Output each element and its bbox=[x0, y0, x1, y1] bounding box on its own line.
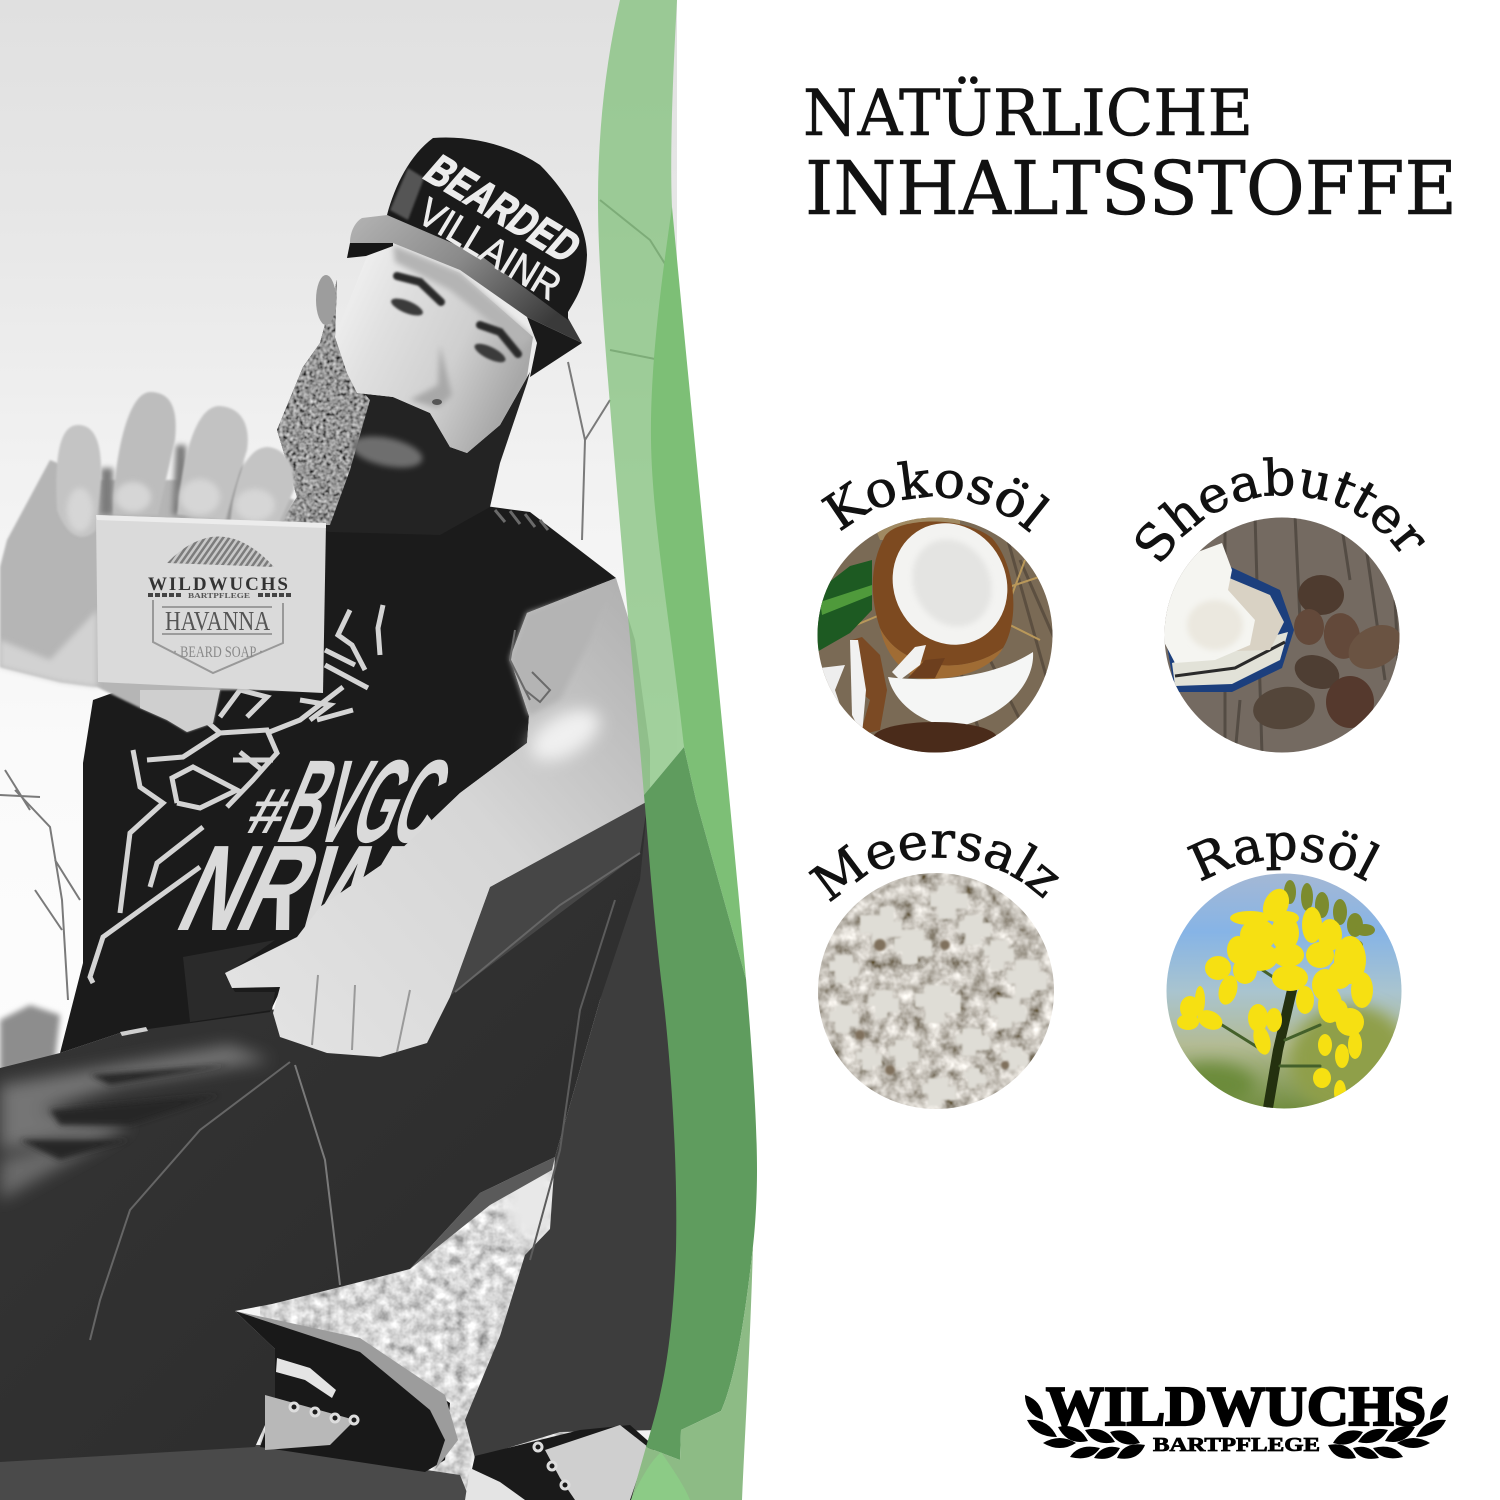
label: Meersalz: Meersalz bbox=[808, 830, 1060, 902]
forehead shadow bbox=[393, 245, 533, 345]
bare tree branches bbox=[0, 200, 672, 1000]
coconut shell with fibres bbox=[873, 521, 1013, 665]
green buds bbox=[1284, 880, 1375, 951]
belt highlight bbox=[120, 1027, 148, 1036]
straw behind coconut bbox=[870, 515, 960, 540]
shirt print: stag bbox=[90, 687, 353, 983]
shirt print: tribal spikes at top bbox=[325, 605, 383, 688]
brand logo bbox=[1025, 1376, 1448, 1459]
under brim strip bbox=[347, 240, 393, 258]
shoulder ribbing bbox=[495, 510, 548, 530]
gaps between fingers bbox=[100, 445, 244, 525]
trouser fold shadows bbox=[20, 1065, 230, 1160]
bright grass patch bbox=[502, 1158, 558, 1242]
soap shield bbox=[153, 600, 283, 673]
photo: bearded man holding soap bbox=[0, 0, 690, 1500]
image: rapeseed flower bbox=[1165, 872, 1410, 1115]
neck and beard bbox=[277, 280, 530, 535]
grass seen below the knee bbox=[260, 1150, 570, 1500]
soap bar bbox=[96, 515, 326, 693]
coconut piece bbox=[892, 645, 926, 680]
coffee beans bbox=[873, 722, 997, 754]
right arm and hand bbox=[225, 578, 650, 1057]
shea nuts bbox=[1250, 575, 1409, 733]
label: Kokosöl: Kokosöl bbox=[820, 460, 1050, 533]
soap rule lines bbox=[162, 607, 272, 634]
finger nails bbox=[67, 479, 275, 532]
salt crystals bbox=[829, 885, 1047, 1106]
soap text: WILDWUCHS: WILDWUCHS bbox=[148, 574, 288, 595]
ingredient: Sheabutter bbox=[1136, 457, 1425, 752]
logo laurel right bbox=[1328, 1395, 1448, 1459]
ground vegetation on the left bbox=[0, 1005, 60, 1072]
nostril bbox=[432, 399, 442, 405]
bowl interior bbox=[1200, 572, 1284, 652]
eyebrows bbox=[397, 276, 518, 354]
stem and branches bbox=[1222, 965, 1320, 1108]
finger two bbox=[113, 392, 176, 515]
cap text: VILLAINR: VILLAINR bbox=[410, 190, 568, 309]
coconut chunk bbox=[888, 652, 1033, 727]
image: sea salt bbox=[815, 870, 1060, 1115]
shirt text: BVGC: BVGC bbox=[264, 736, 467, 868]
ingredient: Rapsöl bbox=[1166, 830, 1402, 1108]
cap logo text bbox=[410, 147, 591, 309]
curled shavings bbox=[852, 637, 887, 735]
face bbox=[335, 272, 533, 453]
right leg bbox=[465, 800, 690, 1458]
knee highlight seam bbox=[410, 1157, 555, 1269]
cap mesh highlight bbox=[390, 168, 424, 220]
bowl stripes bbox=[1172, 632, 1288, 686]
image: shea butter bbox=[1160, 515, 1409, 755]
finger three bbox=[177, 406, 248, 520]
right shoe bbox=[465, 1425, 655, 1500]
cap brim bbox=[350, 215, 582, 343]
soap text: BEARD SOAP: · BEARD SOAP · bbox=[173, 644, 263, 661]
belt bbox=[183, 940, 275, 1022]
logo text: BARTPFLEGE: BARTPFLEGE bbox=[1153, 1434, 1320, 1456]
finger one bbox=[56, 425, 101, 537]
shirt text: hash: # bbox=[240, 775, 298, 847]
ground bbox=[0, 1440, 470, 1500]
eyes bbox=[389, 295, 508, 366]
label: Rapsöl: Rapsöl bbox=[1186, 830, 1380, 882]
image: coconut bbox=[815, 503, 1055, 755]
title line 2: INHALTSSTOFFE bbox=[805, 146, 1457, 232]
elbow shadow bbox=[510, 585, 610, 716]
arm highlight bbox=[518, 703, 605, 766]
soap text: HAVANNA: HAVANNA bbox=[165, 606, 270, 636]
green wave: tinted grass bbox=[631, 1246, 753, 1500]
logo text: WILDWUCHS: WILDWUCHS bbox=[1046, 1376, 1426, 1438]
coconut inner shade bbox=[897, 525, 1007, 641]
knuckle creases bbox=[312, 975, 410, 1052]
t-shirt bbox=[60, 506, 616, 1053]
left shoe bbox=[235, 1311, 458, 1472]
lower palm bbox=[0, 610, 97, 687]
soap text: BARTPFLEGE: BARTPFLEGE bbox=[188, 592, 250, 600]
coconut flesh bbox=[871, 503, 1029, 665]
cap text: BEARDED: BEARDED bbox=[414, 147, 591, 271]
ear bbox=[316, 275, 336, 325]
trouser wrinkles highlights bbox=[0, 1045, 270, 1200]
logo laurel left bbox=[1025, 1395, 1145, 1459]
under brim shade bbox=[527, 317, 582, 377]
butter bbox=[1163, 543, 1255, 663]
green wave: bottom highlight bbox=[631, 1452, 690, 1500]
beard speckled edge bbox=[277, 280, 370, 525]
finger four bbox=[230, 447, 294, 525]
left hand bbox=[0, 392, 320, 732]
thigh and lap bbox=[0, 800, 648, 1462]
wood grain bbox=[960, 530, 1055, 750]
thumb under soap bbox=[140, 690, 220, 732]
blurred field bbox=[1290, 1005, 1410, 1115]
title bbox=[803, 76, 1457, 232]
brown shell chip bbox=[908, 658, 945, 678]
brown crevices bbox=[855, 939, 1009, 1075]
denim seams bbox=[90, 853, 640, 1340]
soap dome bbox=[167, 536, 274, 567]
lip and chin highlight bbox=[349, 431, 425, 473]
photo background: sky bbox=[0, 0, 680, 1500]
title line 1: NATÜRLICHE bbox=[803, 76, 1253, 151]
lap fold above seam bbox=[450, 800, 648, 996]
ingredient: Meersalz bbox=[808, 830, 1060, 1109]
ingredient: Kokosöl bbox=[818, 460, 1052, 752]
green wave: dark band bbox=[644, 747, 757, 1460]
nose shadow bbox=[410, 345, 452, 408]
shirt print text bbox=[178, 760, 448, 930]
green wave: mid band bbox=[651, 207, 746, 979]
palm bbox=[0, 460, 320, 732]
shirt text: NRW: NRW bbox=[160, 820, 416, 957]
straw fibres bbox=[820, 560, 1045, 640]
cap crown bbox=[387, 137, 587, 320]
tattoo bbox=[510, 630, 550, 702]
wood grain bbox=[1225, 515, 1400, 755]
soap laurel bbox=[148, 593, 293, 597]
yellow flowers bbox=[1177, 885, 1373, 1104]
label: Sheabutter: Sheabutter bbox=[1136, 457, 1425, 562]
bowl bbox=[1166, 563, 1294, 692]
green wave: light translucent band bbox=[598, 0, 684, 795]
palm leaf bbox=[815, 560, 872, 653]
